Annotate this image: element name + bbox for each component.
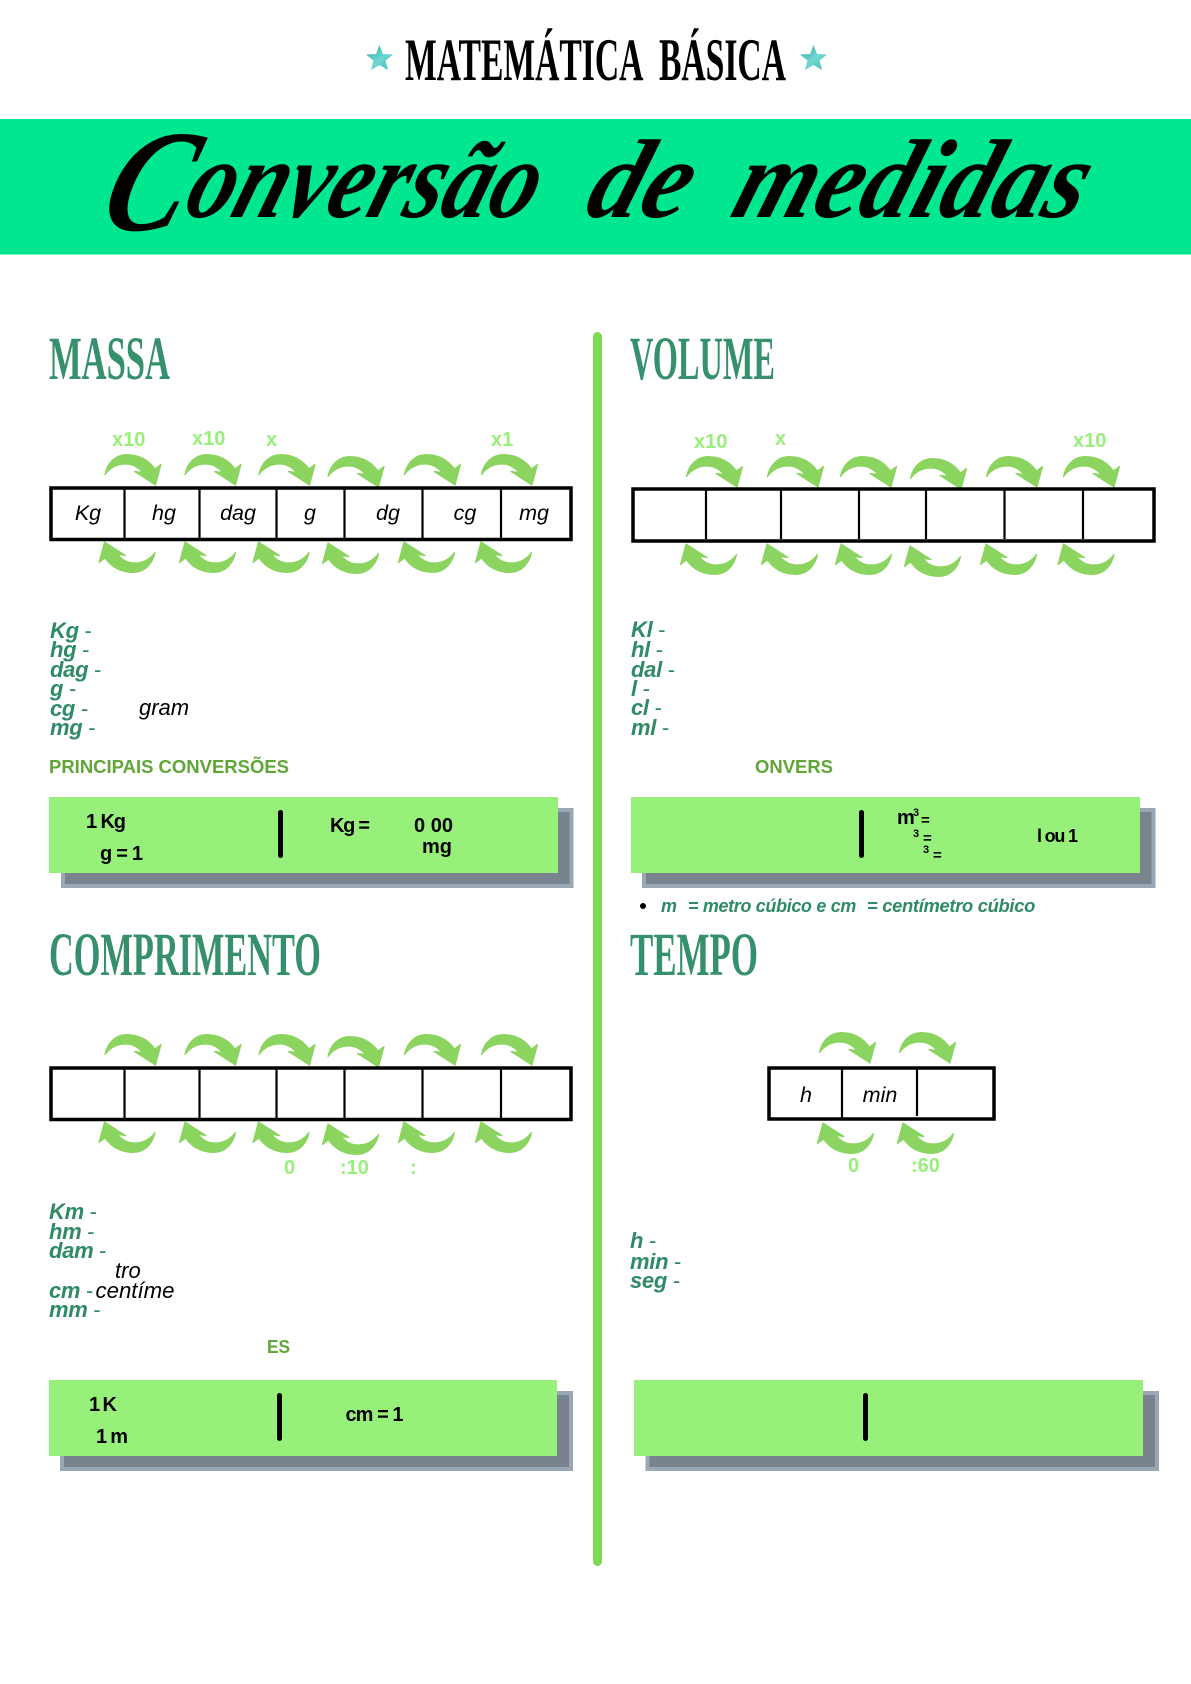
banner title text: de — [574, 118, 714, 241]
definitions — [49, 1199, 174, 1322]
title text: MATEMÁTICA BÁSICA — [405, 27, 786, 93]
definitions: l - — [631, 676, 650, 701]
definitions: cl - — [631, 695, 662, 720]
definitions: min - — [630, 1249, 681, 1274]
note: cubic units: m — [661, 896, 677, 916]
definitions: ml - — [631, 715, 669, 740]
definitions: gram — [139, 695, 189, 720]
arrows: top — [686, 457, 1120, 489]
unit table: g — [304, 501, 316, 525]
definitions: mm - — [49, 1297, 100, 1322]
title: Matemática Básica — [366, 27, 827, 93]
definitions: h - — [630, 1228, 656, 1253]
icon: left star — [366, 45, 393, 70]
definitions: Kl - — [631, 617, 665, 642]
conversion box: 3 — [913, 828, 919, 840]
divisor labels — [284, 1157, 417, 1179]
divisor labels: 0 — [848, 1155, 859, 1177]
unit table — [51, 1068, 571, 1120]
subheading fragment: ES — [267, 1336, 290, 1357]
multiplier labels: x10 — [694, 431, 727, 453]
conversion box: 1 K — [89, 1394, 118, 1416]
banner title text: medidas — [720, 118, 1110, 241]
multiplier labels: x10 — [1073, 430, 1106, 452]
definitions: dag - — [50, 657, 101, 682]
arrows: bottom — [680, 544, 1114, 576]
note: cubic units — [640, 896, 1035, 916]
arrows: top — [105, 455, 538, 487]
heading: volume: VOLUME — [630, 326, 775, 393]
definitions — [630, 1228, 681, 1293]
panel: comprimento — [49, 922, 571, 1469]
definitions: hm - — [49, 1219, 94, 1244]
unit table: Kg — [75, 501, 101, 525]
panel: volume — [630, 326, 1154, 916]
divisor labels — [848, 1155, 940, 1177]
definitions — [631, 617, 675, 740]
conversion box: mg — [422, 836, 452, 858]
unit table: mg — [519, 501, 549, 525]
multiplier labels: x — [775, 428, 786, 450]
definitions: centíme — [96, 1278, 174, 1303]
multiplier labels — [694, 428, 1106, 453]
conversion box: g = 1 — [100, 843, 143, 865]
unit table — [633, 489, 1154, 541]
definitions: tro — [115, 1258, 141, 1283]
definitions — [49, 618, 189, 740]
subheading: principais conversoes: PRINCIPAIS CONVERSÕES — [49, 756, 289, 777]
conversion box: = — [921, 812, 930, 829]
conversion box: 0 00 — [414, 815, 453, 837]
heading: tempo: TEMPO — [630, 922, 758, 989]
subheading: conversoes fragment: ONVERS — [755, 756, 833, 777]
panel: tempo — [630, 922, 1157, 1469]
conversion box — [631, 797, 1154, 886]
unit table: min — [863, 1083, 897, 1107]
conversion box: m — [897, 807, 915, 829]
definitions: cg - — [50, 696, 88, 721]
definitions: cm - — [49, 1278, 93, 1303]
conversion box: cm = 1 — [346, 1404, 404, 1426]
multiplier labels: x — [266, 429, 277, 451]
definitions: hg - — [50, 637, 89, 662]
heading: comprimento: COMPRIMENTO — [49, 922, 321, 989]
definitions: dal - — [631, 657, 675, 682]
conversion box: 1 Kg — [86, 811, 126, 833]
conversion box: 3 — [913, 807, 919, 819]
unit table — [51, 488, 571, 540]
definitions: g - — [49, 676, 76, 701]
unit table: h — [800, 1083, 812, 1107]
banner title text: onversão — [173, 118, 562, 241]
conversion box: = — [923, 830, 932, 847]
arrows: top — [820, 1033, 956, 1063]
conversion box: l ou 1 — [1037, 826, 1078, 846]
definitions: mg - — [50, 715, 95, 740]
arrows: bottom — [99, 542, 532, 573]
arrows: bottom — [818, 1123, 954, 1153]
arrows: top — [105, 1035, 538, 1067]
banner title text — [85, 101, 1110, 262]
definitions: Km - — [49, 1199, 97, 1224]
unit table: cg — [454, 501, 476, 525]
panel: massa — [49, 326, 572, 886]
banner title text: C — [85, 101, 220, 262]
note: cubic units: = centímetro cúbico — [867, 896, 1035, 916]
conversion box: 1 m — [96, 1426, 128, 1448]
multiplier labels — [112, 428, 513, 451]
conversion box: Kg = — [330, 815, 370, 837]
conversion box — [634, 1380, 1157, 1469]
banner: Conversão de medidas — [0, 101, 1191, 262]
multiplier labels: x10 — [112, 429, 145, 451]
divisor labels: :60 — [911, 1155, 940, 1177]
definitions: Kg - — [50, 618, 92, 643]
definitions: dam - — [49, 1238, 106, 1263]
conversion box — [49, 1380, 571, 1469]
unit table: hg — [152, 501, 176, 525]
divisor labels: 0 — [284, 1157, 295, 1179]
unit table: dg — [376, 501, 400, 525]
multiplier labels: x10 — [192, 428, 225, 450]
definitions: seg - — [630, 1268, 680, 1293]
conversion box — [49, 797, 572, 886]
definitions: hl - — [631, 637, 663, 662]
heading: massa: MASSA — [49, 326, 170, 393]
multiplier labels: x1 — [491, 429, 513, 451]
divisor labels: : — [410, 1157, 417, 1179]
divisor labels: :10 — [340, 1157, 369, 1179]
conversion box: = — [933, 847, 942, 864]
unit table: dag — [220, 501, 256, 525]
conversion box: 3 — [923, 844, 929, 856]
center divider — [593, 332, 602, 1566]
note: cubic units: = metro cúbico e cm — [688, 896, 856, 916]
arrows: bottom — [99, 1122, 532, 1154]
icon: right star — [800, 45, 827, 70]
unit table — [769, 1068, 994, 1119]
